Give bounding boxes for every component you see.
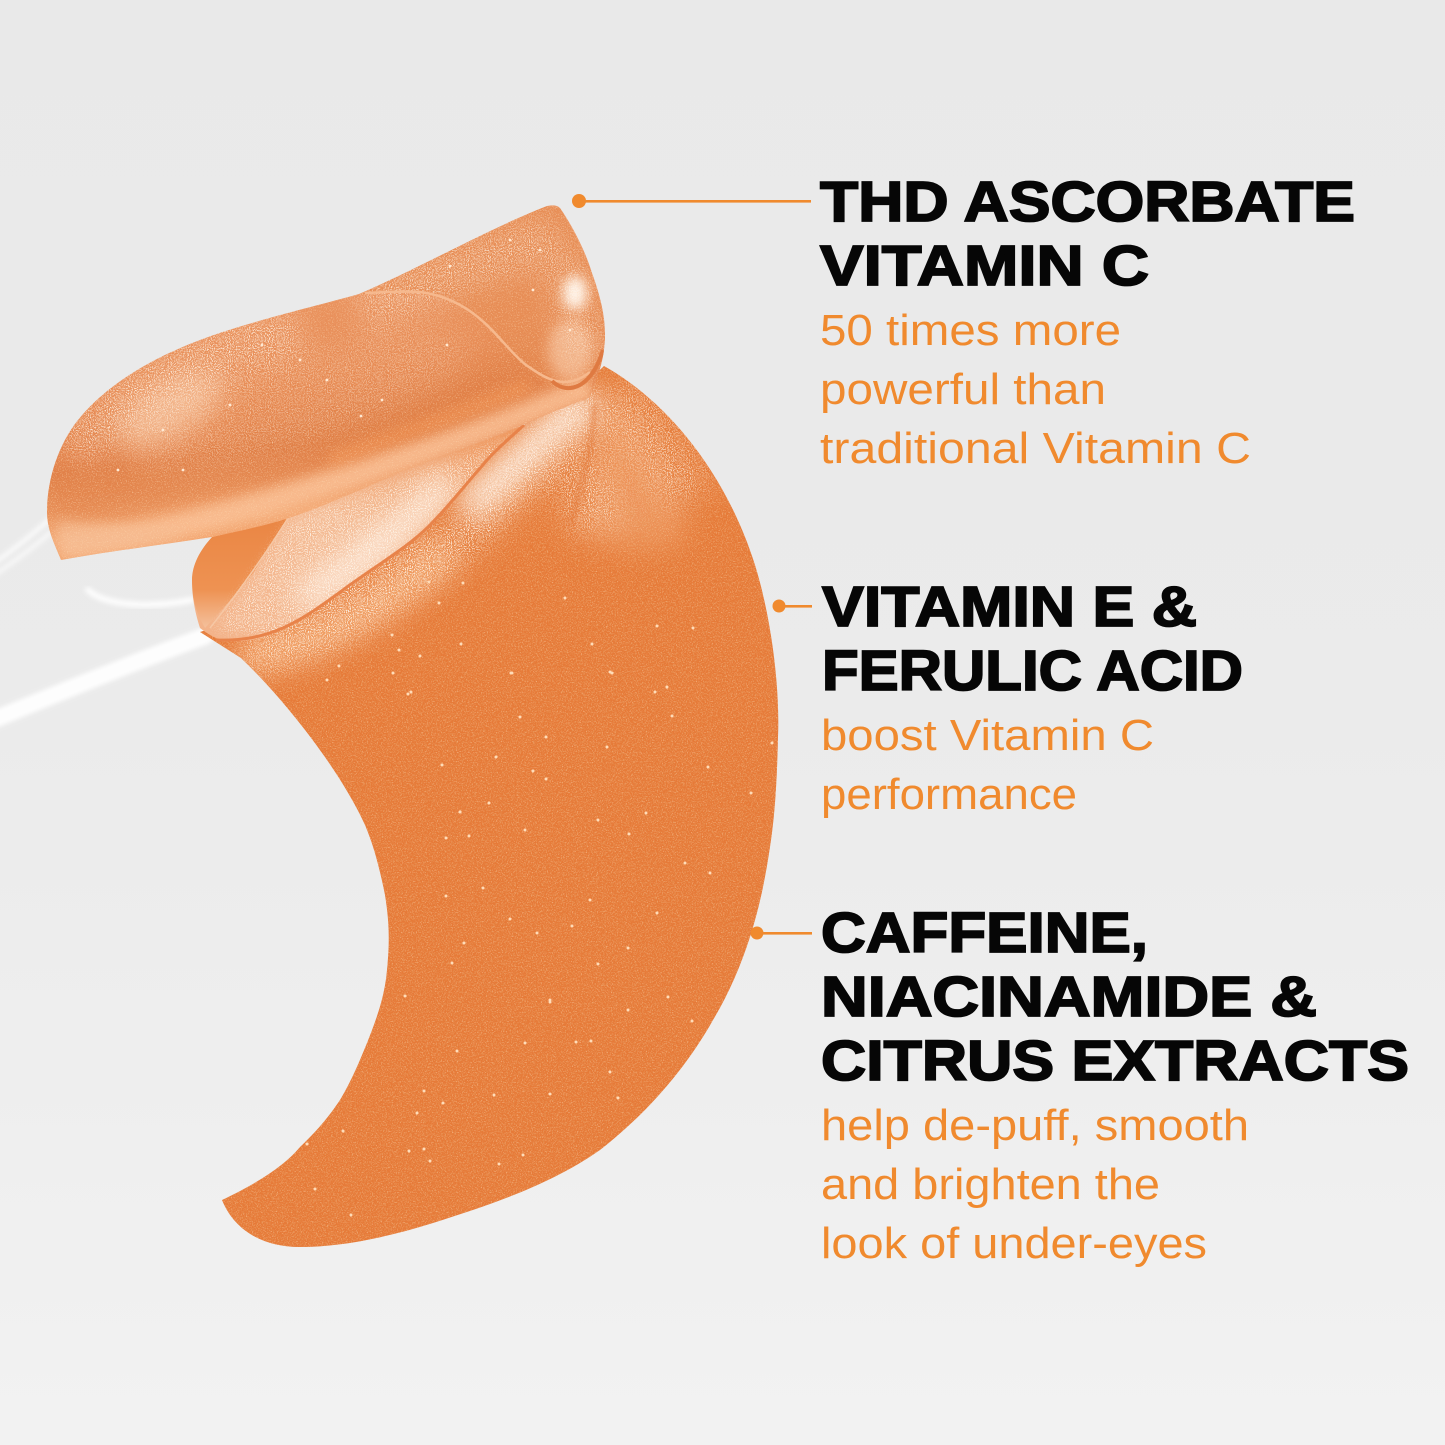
description: performance bbox=[821, 770, 1077, 819]
leader line with dot bbox=[572, 194, 811, 208]
heading: FERULIC ACID bbox=[822, 639, 1243, 703]
description bbox=[821, 1101, 1249, 1268]
heading bbox=[821, 901, 1409, 1093]
heading: VITAMIN E & bbox=[822, 575, 1197, 639]
fold edge line bbox=[216, 425, 524, 640]
heading: THD ASCORBATE bbox=[820, 170, 1355, 234]
description: boost Vitamin C bbox=[821, 711, 1154, 760]
curled top flap bbox=[40, 200, 610, 565]
eye patch illustration bbox=[0, 200, 790, 1260]
leader line with dot bbox=[772, 600, 812, 612]
heading: CITRUS EXTRACTS bbox=[821, 1029, 1409, 1093]
callout: vitamin E and ferulic acid bbox=[772, 575, 1243, 819]
heading bbox=[822, 575, 1243, 703]
description: powerful than bbox=[820, 365, 1106, 414]
description: look of under-eyes bbox=[821, 1219, 1207, 1268]
heading bbox=[820, 170, 1355, 298]
heading: NIACINAMIDE & bbox=[821, 965, 1317, 1029]
flap glitter specks bbox=[118, 240, 570, 470]
callout: THD ascorbate vitamin C bbox=[572, 170, 1355, 473]
transparent strap strands bbox=[0, 519, 205, 722]
glitter specks bbox=[307, 582, 772, 1215]
leader line with dot bbox=[750, 926, 812, 940]
description: help de-puff, smooth bbox=[821, 1101, 1249, 1150]
description: and brighten the bbox=[821, 1160, 1160, 1209]
heading: CAFFEINE, bbox=[821, 901, 1148, 965]
description bbox=[820, 306, 1251, 473]
description bbox=[821, 711, 1154, 819]
description: 50 times more bbox=[820, 306, 1121, 355]
callout: caffeine, niacinamide and citrus extracts bbox=[750, 901, 1409, 1268]
lower fold of the patch bbox=[185, 420, 530, 645]
description: traditional Vitamin C bbox=[820, 424, 1251, 473]
heading: VITAMIN C bbox=[820, 234, 1149, 298]
main under-eye patch bbox=[190, 350, 790, 1260]
